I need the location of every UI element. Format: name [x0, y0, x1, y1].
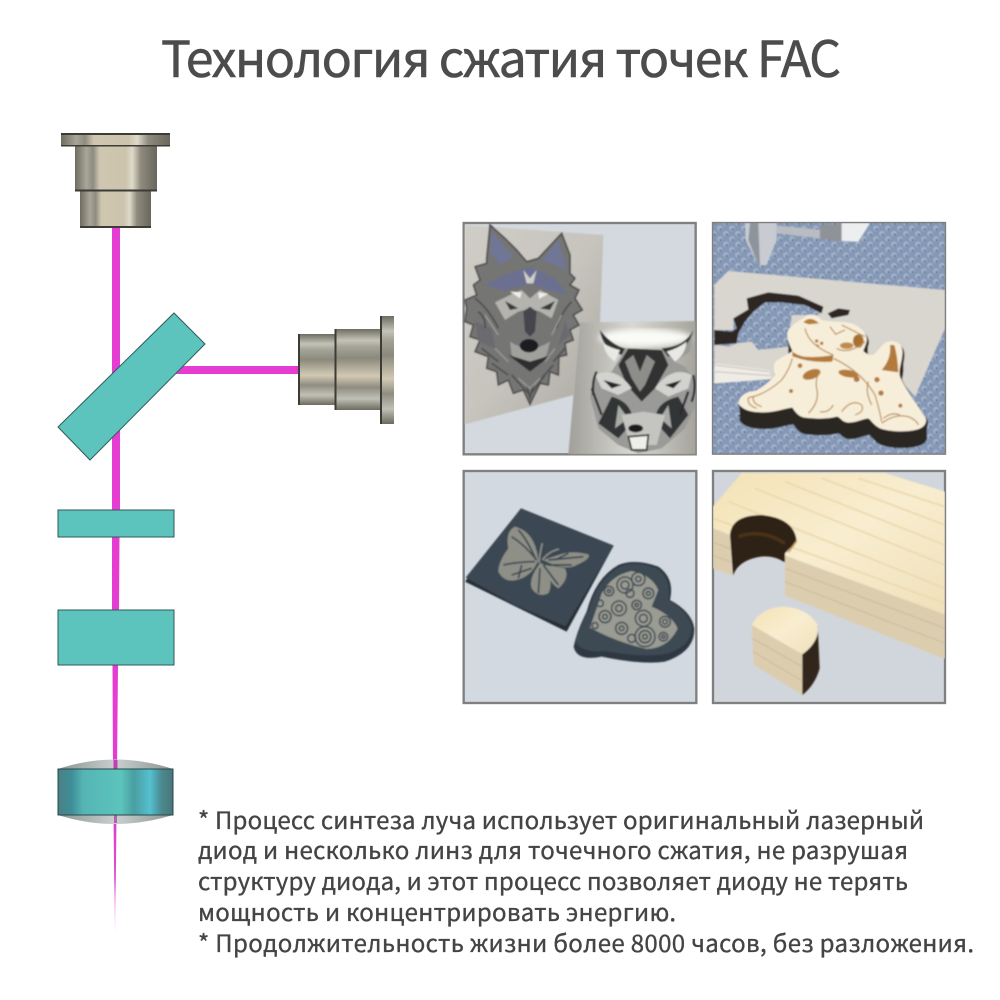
laser head nozzle [745, 223, 870, 265]
slate heart with circles [574, 562, 694, 663]
title: Технология сжатия точек FAC [161, 20, 841, 92]
beam: vertical from top diode [112, 228, 120, 815]
slate square with butterfly [465, 508, 614, 632]
diagram: laser beam optical path [58, 133, 394, 930]
optic: thin plate [58, 510, 174, 537]
diode module: top [61, 133, 170, 228]
photo panel: laser cut plywood dog [713, 223, 945, 454]
diode module: right [298, 316, 394, 424]
text line 1: * Процесс синтеза луча использует оригинальный лазерный [198, 801, 924, 836]
pine board with round notch [713, 473, 945, 659]
dog: dark extrusion [738, 334, 929, 449]
text line 2: диод и несколько линз для точечного сжатия, не разрушая [198, 831, 908, 866]
wood sheet with cut-out [714, 271, 945, 397]
description text [198, 801, 974, 959]
beam: focused output [114, 815, 116, 930]
photo panel: engraved wolves on metal [464, 223, 696, 454]
optic: thick block [58, 610, 174, 665]
mirror: beam combiner [58, 313, 205, 460]
text line 3: структуру диода, и этот процесс позволяет диоду не терять [198, 862, 908, 897]
steel sheet with wolf [465, 225, 603, 424]
steel plate with wolf [568, 321, 696, 454]
photo panel: engraved slate coasters [464, 471, 696, 703]
focusing lens [58, 760, 173, 824]
beam: horizontal from side diode [175, 366, 298, 374]
text line 4: мощность и концентрировать энергию. [198, 893, 676, 928]
photo panel: laser cut pine block [713, 471, 945, 703]
dog: engraved face [738, 314, 926, 431]
cut-out pine piece [752, 607, 820, 695]
text line 5: * Продолжительность жизни более 8000 часов, без разложения. [198, 924, 974, 959]
